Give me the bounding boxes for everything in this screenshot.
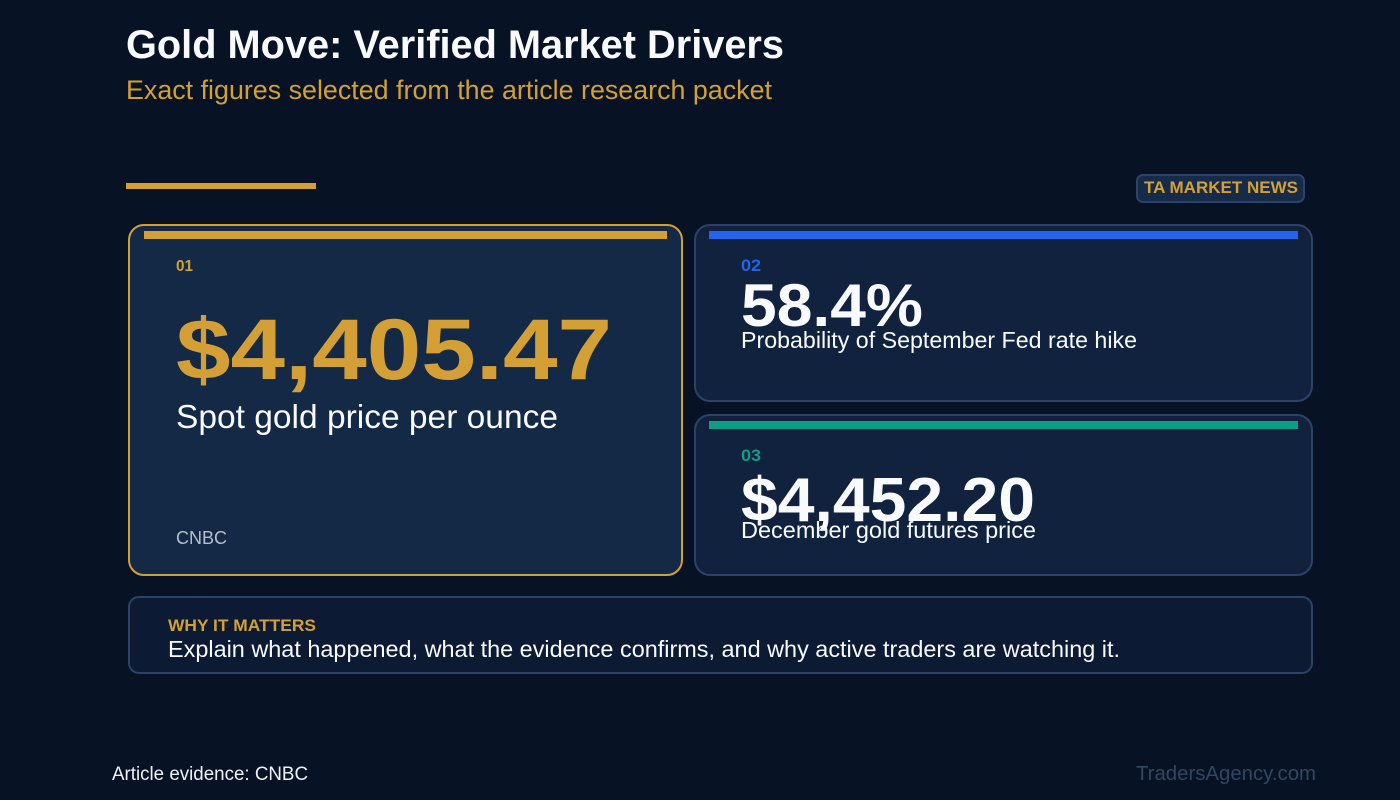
footer brand: TradersAgency.com xyxy=(1136,763,1316,785)
panel: December gold futures xyxy=(695,415,1312,575)
card number: 02 xyxy=(741,256,761,275)
figure label: Spot gold price per ounce xyxy=(176,398,558,435)
panel: why it matters xyxy=(129,597,1312,673)
card accent bar xyxy=(709,421,1298,429)
source: CNBC xyxy=(176,528,227,548)
card number: 03 xyxy=(741,446,761,465)
callout text: Explain what happened, what the evidence confirms, and why active traders are watching it. xyxy=(168,636,1120,662)
figure label: December gold futures price xyxy=(741,517,1036,543)
badge: TA Market News: TA MARKET NEWS xyxy=(1144,179,1298,197)
panel: spot gold price xyxy=(129,225,682,575)
big figure: 58.4% xyxy=(741,272,923,339)
footer source: Article evidence: CNBC xyxy=(112,764,308,785)
callout heading: WHY IT MATTERS xyxy=(168,617,316,635)
card number: 01 xyxy=(176,258,193,275)
title: Gold Move: Verified Market Drivers xyxy=(126,23,784,67)
card accent bar xyxy=(709,231,1298,239)
card accent bar xyxy=(144,231,667,239)
gold accent rule xyxy=(126,183,316,189)
big figure: $4,452.20 xyxy=(741,466,1035,535)
badge: TA Market News xyxy=(1137,175,1304,202)
panel: Fed rate hike probability xyxy=(695,225,1312,401)
subtitle: Exact figures selected from the article research packet xyxy=(126,75,773,105)
big figure: $4,405.47 xyxy=(176,302,612,398)
figure label: Probability of September Fed rate hike xyxy=(741,327,1137,353)
